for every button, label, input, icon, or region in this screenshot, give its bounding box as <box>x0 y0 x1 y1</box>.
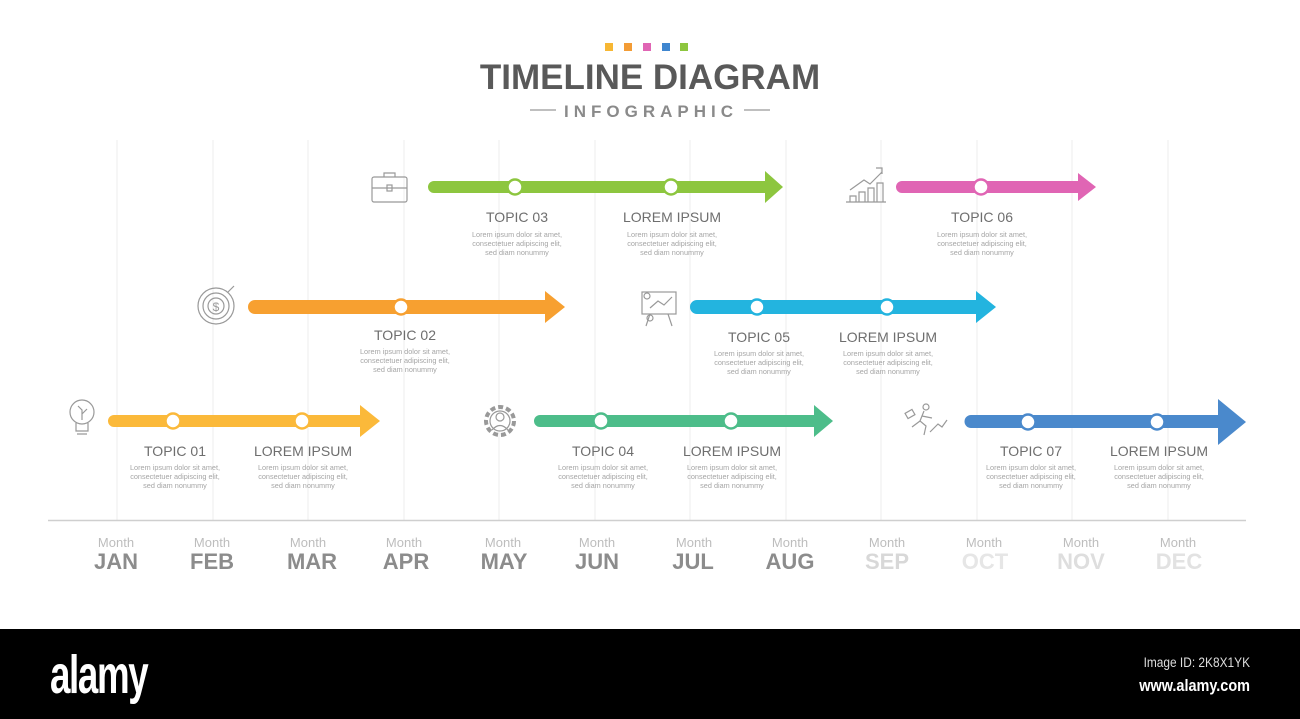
body texts: consectetuer adipiscing elit, <box>1114 472 1204 481</box>
body texts: Lorem ipsum dolor sit amet, <box>472 230 562 239</box>
body texts: sed diam nonummy <box>640 248 704 257</box>
subtitle: INFOGRAPHIC <box>564 102 738 121</box>
text blocks: LOREM IPSUM <box>254 443 352 459</box>
icon: dollar cycle <box>198 286 234 324</box>
month labels: Month <box>98 535 134 550</box>
month labels: Month <box>772 535 808 550</box>
body texts: sed diam nonummy <box>1127 481 1191 490</box>
text blocks: TOPIC 01 <box>144 443 206 459</box>
arrow: green topic 03 <box>428 171 783 203</box>
icon: light bulb <box>70 400 94 434</box>
text blocks: LOREM IPSUM <box>623 209 721 225</box>
body texts: Lorem ipsum dolor sit amet, <box>130 463 220 472</box>
footer bar: alamy <box>50 644 149 705</box>
arrow: cyan topic 05 <box>690 291 996 323</box>
body texts: Lorem ipsum dolor sit amet, <box>258 463 348 472</box>
text blocks: TOPIC 05 <box>728 329 790 345</box>
month labels: AUG <box>766 549 814 574</box>
text blocks <box>144 209 1208 459</box>
icon: gear person <box>486 407 514 435</box>
month labels: Month <box>194 535 230 550</box>
body texts: Lorem ipsum dolor sit amet, <box>714 349 804 358</box>
month labels: Month <box>1063 535 1099 550</box>
body texts: consectetuer adipiscing elit, <box>687 472 777 481</box>
footer bar: www.alamy.com <box>1138 677 1250 695</box>
body texts: consectetuer adipiscing elit, <box>472 239 562 248</box>
body texts: sed diam nonummy <box>950 248 1014 257</box>
month labels: OCT <box>962 549 1009 574</box>
footer bar <box>0 629 1300 719</box>
title: TIMELINE DIAGRAM <box>480 58 820 97</box>
month labels: Month <box>485 535 521 550</box>
icon: growth chart <box>846 168 886 202</box>
month labels: FEB <box>190 549 234 574</box>
body texts <box>130 230 1204 490</box>
icon: briefcase <box>372 173 407 202</box>
body texts: Lorem ipsum dolor sit amet, <box>558 463 648 472</box>
text blocks: TOPIC 04 <box>572 443 634 459</box>
month labels: JAN <box>94 549 138 574</box>
month labels: Month <box>966 535 1002 550</box>
icon: dollar cycle: $ <box>213 300 220 314</box>
body texts: sed diam nonummy <box>999 481 1063 490</box>
icon: presentation <box>642 292 676 326</box>
arrow: blue topic 07 <box>965 399 1246 445</box>
text blocks: LOREM IPSUM <box>1110 443 1208 459</box>
month labels: NOV <box>1057 549 1105 574</box>
body texts: sed diam nonummy <box>271 481 335 490</box>
month labels: Month <box>290 535 326 550</box>
arrow: pink topic 06 <box>896 173 1096 201</box>
month labels: Month <box>1160 535 1196 550</box>
body texts: consectetuer adipiscing elit, <box>558 472 648 481</box>
body texts: Lorem ipsum dolor sit amet, <box>986 463 1076 472</box>
arrow: teal topic 04 <box>534 405 833 437</box>
body texts: consectetuer adipiscing elit, <box>986 472 1076 481</box>
month labels: Month <box>579 535 615 550</box>
month labels: APR <box>383 549 429 574</box>
body texts: sed diam nonummy <box>856 367 920 376</box>
month labels: JUL <box>672 549 714 574</box>
body texts: sed diam nonummy <box>571 481 635 490</box>
month labels: MAR <box>287 549 337 574</box>
month labels: JUN <box>575 549 619 574</box>
month labels <box>94 535 1202 574</box>
text blocks: TOPIC 02 <box>374 327 436 343</box>
month labels: Month <box>676 535 712 550</box>
body texts: consectetuer adipiscing elit, <box>937 239 1027 248</box>
arrow: yellow topic 01 <box>108 405 380 437</box>
body texts: consectetuer adipiscing elit, <box>360 356 450 365</box>
month labels: MAY <box>481 549 528 574</box>
footer bar: Image ID: 2K8X1YK <box>1144 654 1250 670</box>
body texts: Lorem ipsum dolor sit amet, <box>627 230 717 239</box>
body texts: consectetuer adipiscing elit, <box>130 472 220 481</box>
body texts: consectetuer adipiscing elit, <box>258 472 348 481</box>
body texts: Lorem ipsum dolor sit amet, <box>360 347 450 356</box>
body texts: consectetuer adipiscing elit, <box>714 358 804 367</box>
month labels: Month <box>869 535 905 550</box>
body texts: sed diam nonummy <box>700 481 764 490</box>
body texts: Lorem ipsum dolor sit amet, <box>937 230 1027 239</box>
body texts: sed diam nonummy <box>143 481 207 490</box>
body texts: sed diam nonummy <box>485 248 549 257</box>
month labels: Month <box>386 535 422 550</box>
color squares <box>605 43 688 51</box>
text blocks: LOREM IPSUM <box>683 443 781 459</box>
body texts: sed diam nonummy <box>727 367 791 376</box>
body texts: consectetuer adipiscing elit, <box>843 358 933 367</box>
month labels: SEP <box>865 549 909 574</box>
body texts: sed diam nonummy <box>373 365 437 374</box>
body texts: Lorem ipsum dolor sit amet, <box>1114 463 1204 472</box>
body texts: consectetuer adipiscing elit, <box>627 239 717 248</box>
text blocks: TOPIC 06 <box>951 209 1013 225</box>
icon: runner <box>905 404 947 435</box>
arrow: orange topic 02 <box>248 291 565 323</box>
month labels: DEC <box>1156 549 1202 574</box>
text blocks: TOPIC 03 <box>486 209 548 225</box>
body texts: Lorem ipsum dolor sit amet, <box>843 349 933 358</box>
text blocks: LOREM IPSUM <box>839 329 937 345</box>
text blocks: TOPIC 07 <box>1000 443 1062 459</box>
body texts: Lorem ipsum dolor sit amet, <box>687 463 777 472</box>
